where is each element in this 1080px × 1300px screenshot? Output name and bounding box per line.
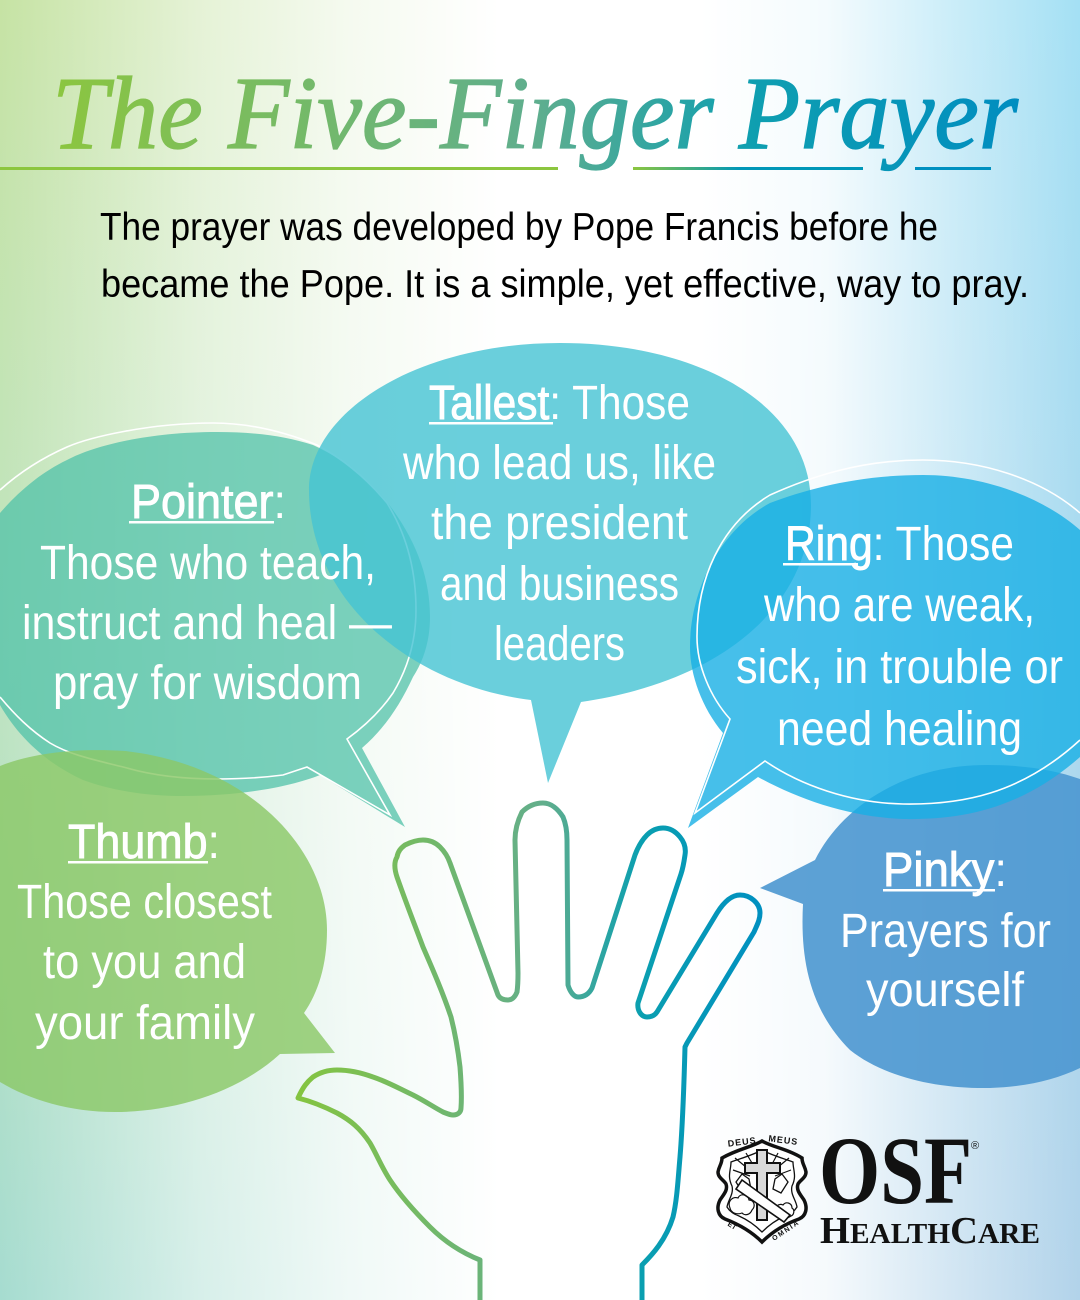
icon: clouds [729,1195,794,1218]
title: The Five-Finger Prayer [52,56,1018,171]
pointer text: Pointer: [131,476,286,529]
OSF logo: ® [971,1140,979,1152]
icon: crossed arms [736,1180,790,1222]
pointer text: instruct and heal — [22,597,392,650]
icon: raised hands [736,1174,788,1193]
icon: shield crest: MEUS [768,1133,798,1147]
thumb bubble shape [0,750,335,1112]
pinky text: Pinky: [883,844,1007,897]
intro text: became the Pope. It is a simple, yet effective, way to pray. [101,263,1029,306]
thumb text: your family [35,997,255,1050]
pointer text [22,476,392,710]
pinky bubble shape [760,765,1080,1088]
icon: sun rays [733,1153,791,1176]
tallest bubble shape [309,343,811,783]
logo wordmark HealthCare: HEALTHCARE [820,1210,1040,1252]
ring bubble shape [688,475,1080,828]
pointer bubble outline [0,423,416,815]
logo wordmark OSF: OSF [819,1117,972,1224]
thumb text: to you and [43,936,246,989]
ring text: who are weak, [763,579,1035,632]
thumb text: Thumb: [68,816,220,869]
icon: cross [745,1150,780,1220]
pinky text: yourself [866,964,1025,1017]
pointer text: Those who teach, [40,537,376,590]
thumb text [17,816,272,1050]
hand outline [298,803,760,1300]
tallest text: who lead us, like [402,437,716,490]
tallest text: and business [440,558,679,611]
tallest text: the president [431,497,688,550]
thumb text: Those closest [17,876,272,929]
ring text: Ring: Those [785,518,1014,571]
tallest text: leaders [494,618,625,671]
ring text: need healing [777,703,1022,756]
intro text [100,206,1029,306]
icon: shield crest: OMNIA [771,1220,800,1243]
icon: shield crest: ET [726,1221,738,1232]
pointer bubble shape [0,432,430,827]
intro text: The prayer was developed by Pope Francis before he [100,206,938,249]
title underline [0,167,991,170]
icon: shield crest: DEUS [727,1135,756,1149]
ring bubble outline [695,460,1080,813]
tallest text [402,377,716,671]
tallest text: Tallest: Those [429,377,690,430]
pinky text: Prayers for [840,905,1051,958]
ring text [736,518,1063,756]
pinky text [840,844,1051,1017]
OSF logo [718,1117,1040,1252]
icon: shield crest [718,1133,806,1243]
pointer text: pray for wisdom [53,657,362,710]
